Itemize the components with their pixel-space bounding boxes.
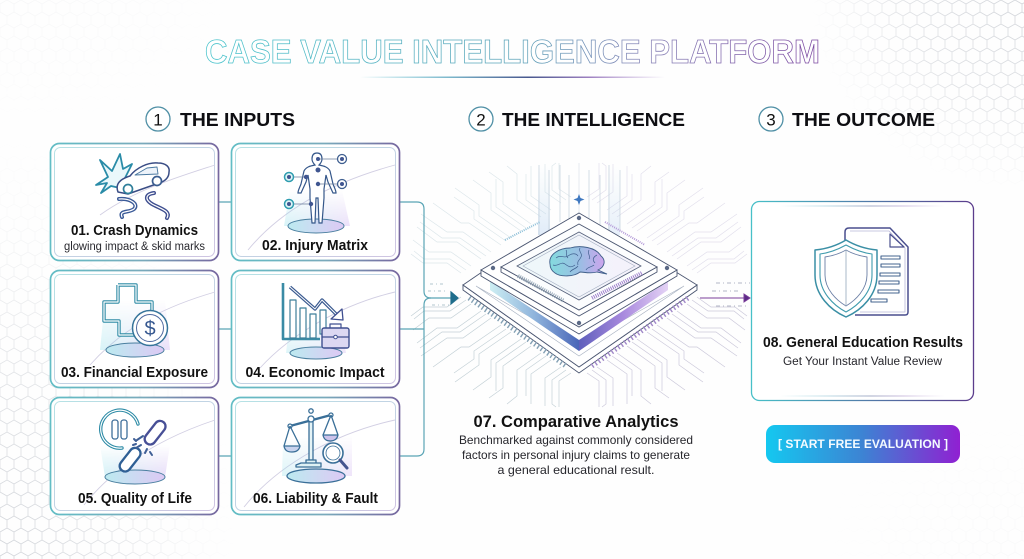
button: start free evaluation [766,425,960,463]
heading: the outcome: THE OUTCOME [792,110,935,130]
icon: medical cross and dollar coin [100,285,170,357]
label: 04. Economic Impact [246,365,385,381]
panel: 03 financial exposure [50,270,218,388]
icon: body with injury nodes [284,153,350,233]
panel: 02 injury matrix [232,144,400,260]
text block: comparative analytics: Benchmarked against commonly considered [459,433,693,447]
pins along lower edges [469,298,688,366]
circuit traces around the chip [411,163,747,407]
inner plate [501,224,657,316]
heading: the outcome [759,107,935,131]
vertical data beams [538,163,620,345]
label: 02. Injury Matrix [262,238,368,254]
sublabel: glowing impact & skid marks [64,241,205,253]
text block: comparative analytics: factors in personal injury claims to generate [462,448,690,462]
icon: shield and document [815,228,908,317]
text block: comparative analytics: a general educational result. [498,463,654,477]
label: 05. Quality of Life [78,491,192,507]
title underline [360,76,665,78]
button: start free evaluation: [ START FREE EVALUATION ] [778,437,948,451]
heading: the inputs: 1 [153,110,163,130]
panel: 05 quality of life [50,398,218,514]
text block: comparative analytics [459,412,693,477]
panel: 01 crash dynamics [50,144,218,260]
brain [550,247,607,276]
output arrow to outcome [700,283,750,306]
panel: 06 liability and fault [232,398,400,514]
corner dots [491,216,669,325]
sublabel: Get Your Instant Value Review [783,356,943,368]
comb details [505,222,645,301]
label: 08. General Education Results [763,335,963,351]
icon: scales and magnifier [282,409,352,483]
icon: medical cross and dollar coin: $ [144,318,156,340]
icon: pause symbol and broken chain [100,410,170,484]
icon: crash and skid marks [96,154,169,218]
icon: falling chart and briefcase [283,283,349,359]
label: 03. Financial Exposure [61,365,208,381]
heading: the inputs [146,107,295,131]
heading: the inputs: THE INPUTS [180,110,295,130]
heading: the outcome: 3 [766,110,776,130]
heading: the intelligence [469,107,685,131]
chip window [517,232,641,300]
input particles [428,284,452,305]
text block: comparative analytics: 07. Comparative Analytics [474,412,678,431]
label: 01. Crash Dynamics [71,223,198,239]
chip illustration [463,163,697,373]
heading: the intelligence: THE INTELLIGENCE [502,110,685,130]
title: CASE VALUE INTELLIGENCE PLATFORM [205,33,820,70]
heading: the intelligence: 2 [476,110,486,130]
glowing sides of upper plate [490,281,668,351]
panel: 04 economic impact [232,270,400,388]
label: 06. Liability & Fault [253,491,378,507]
arrowhead into chip [451,292,458,304]
upper plate [481,213,677,334]
lower board [463,272,697,373]
connector lines from inputs to chip [219,202,458,456]
panel: 08 general education results [752,202,974,400]
